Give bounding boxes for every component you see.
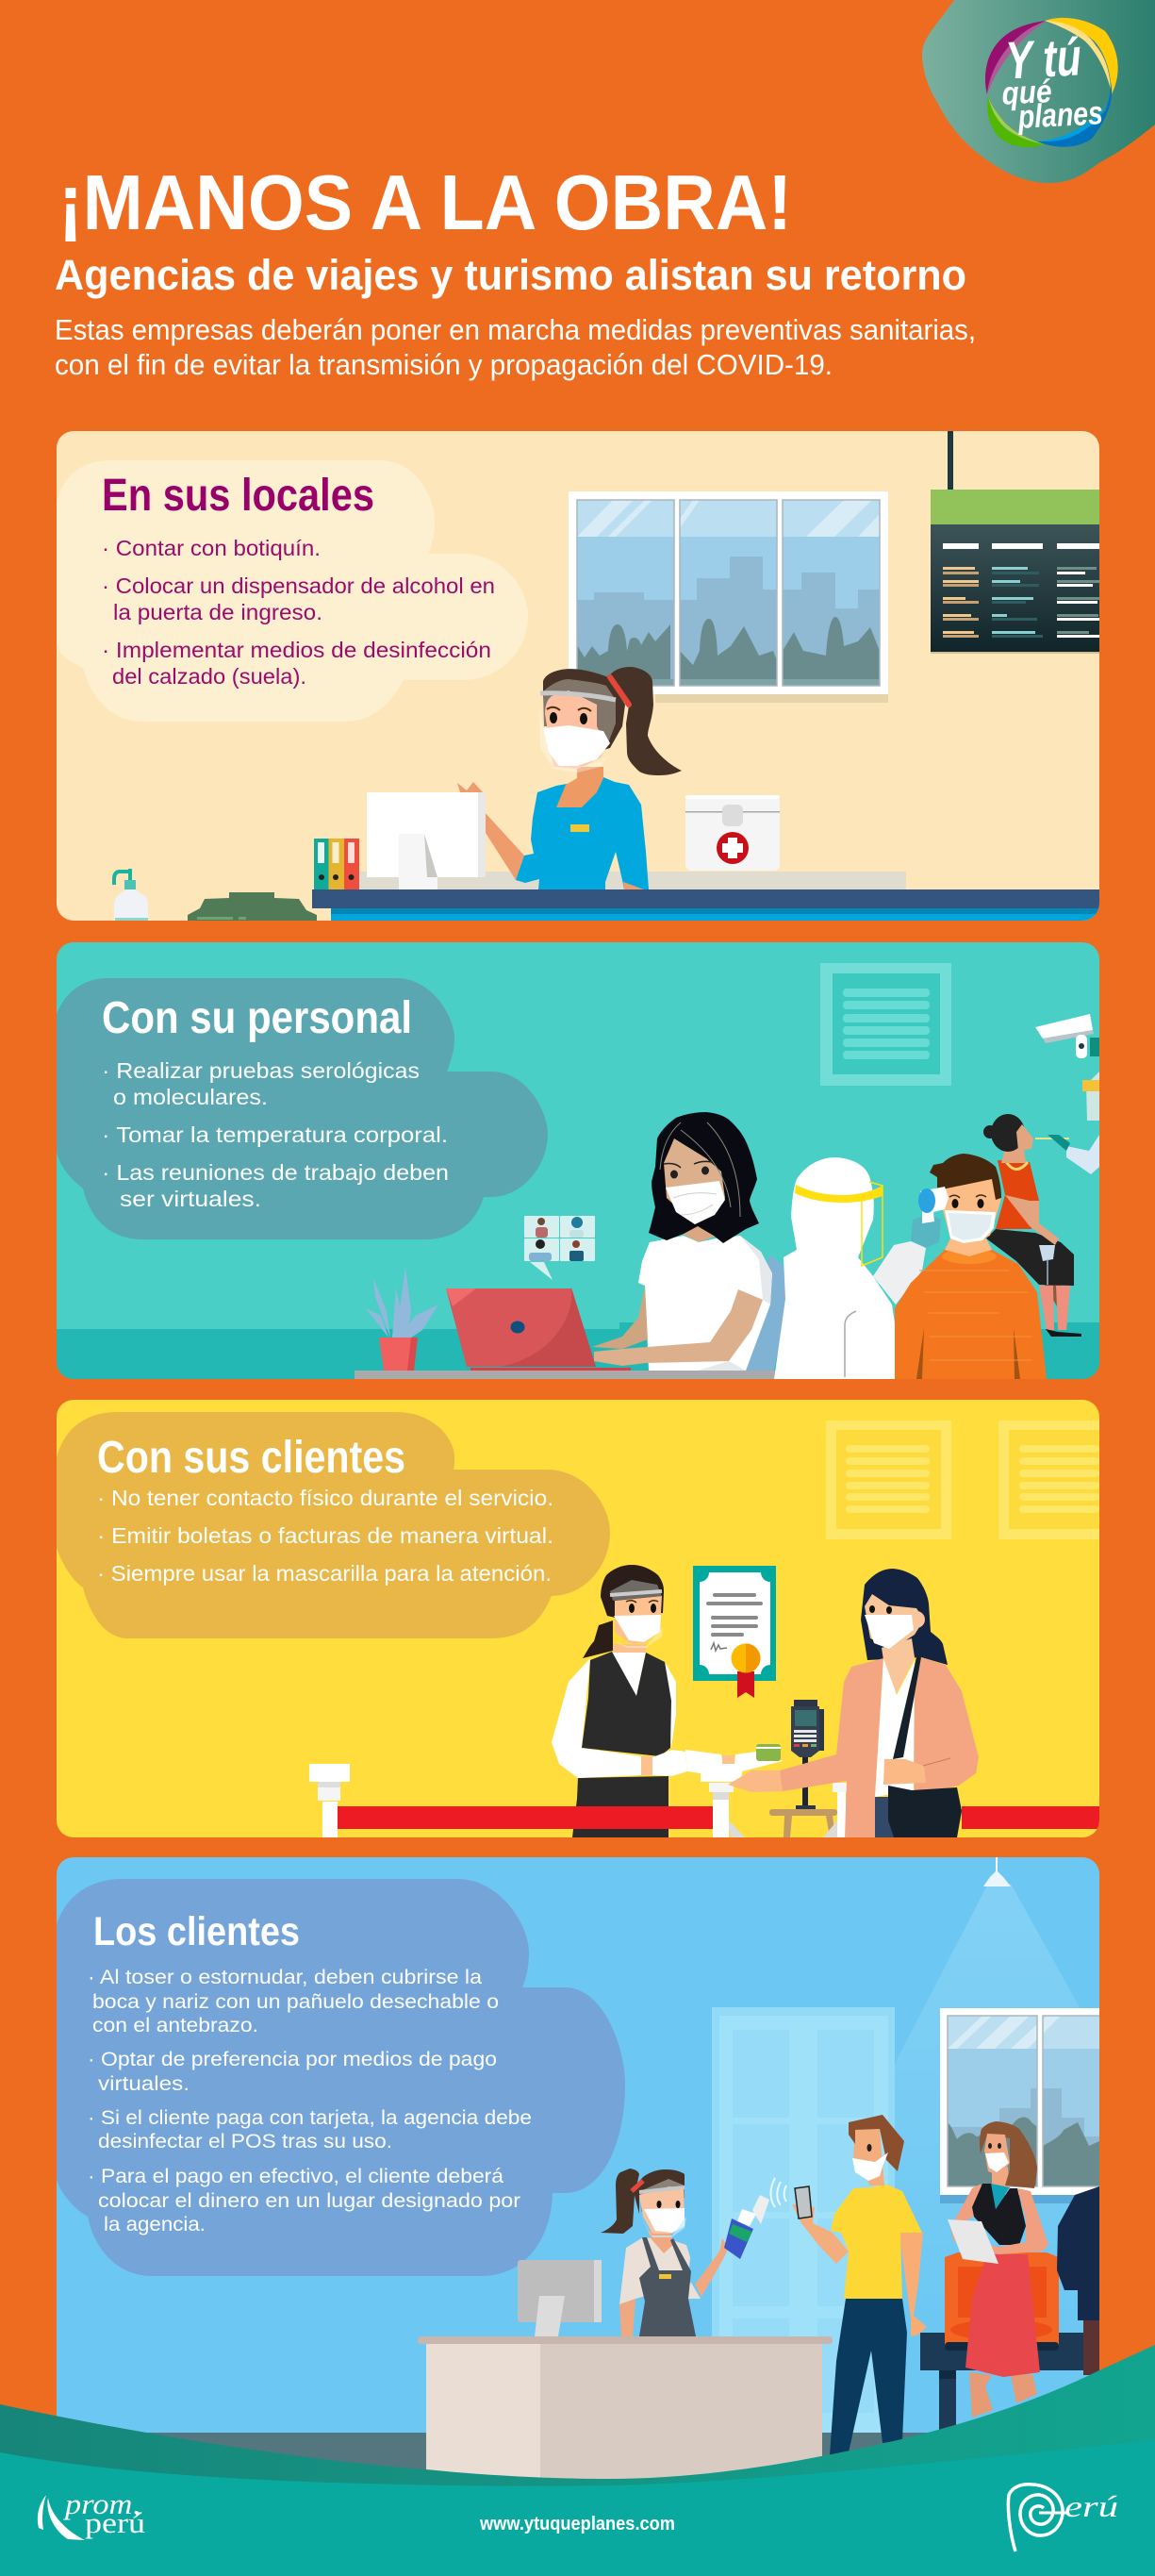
employee in vest: [552, 1565, 687, 1837]
panel: Con su personal: [57, 942, 1099, 1379]
heading: Los clientes: Los clientes: [93, 1909, 300, 1954]
bullet list: boca y nariz con un pañuelo desechable o: [92, 1991, 499, 2013]
cashier: [601, 2169, 729, 2336]
certificate: [693, 1566, 776, 1698]
computer monitor: [367, 792, 486, 890]
bullet list: · Optar de preferencia por medios de pago: [88, 2049, 497, 2070]
window: [569, 491, 888, 703]
bullet list: del calzado (suela).: [112, 664, 306, 689]
heading: En sus locales: En sus locales: [102, 471, 374, 521]
ceiling lamp and light cone: [762, 1857, 1099, 2320]
panel: En sus locales: [57, 431, 1099, 921]
bullet list: [88, 1967, 532, 2235]
bullet list: · Colocar un dispensador de alcohol en: [102, 573, 495, 598]
bullet list: ser virtuales.: [120, 1187, 261, 1211]
bullet list: · Tomar la temperatura corporal.: [102, 1122, 448, 1147]
counter: [312, 889, 1099, 921]
logo: Perú: erú: [1064, 2489, 1118, 2523]
panel: Con sus clientes: [57, 1400, 1099, 1837]
subtitle: Agencias de viajes y turismo alistan su retorno: [55, 251, 966, 299]
logo: prom perú: [38, 2487, 145, 2540]
handheld POS with receipt: [724, 2195, 769, 2259]
bullet list: colocar el dinero en un lugar designado por: [98, 2190, 520, 2212]
customer in yellow shirt: [792, 2115, 927, 2455]
monitor: [518, 2260, 602, 2336]
bullet list: la puerta de ingreso.: [113, 600, 322, 624]
bullet list: o moleculares.: [113, 1085, 268, 1109]
intro text: [55, 313, 976, 381]
seated woman being swabbed: [983, 1114, 1081, 1337]
rope barriers: [309, 1764, 1099, 1837]
text bubble: [57, 978, 548, 1239]
person at right edge: [1057, 2186, 1099, 2375]
heading: Con sus clientes: Con sus clientes: [97, 1433, 405, 1483]
website: www.ytuqueplanes.com: [479, 2514, 675, 2534]
bullet list: · Emitir boletas o facturas de manera virtual.: [97, 1523, 553, 1548]
logo: Y tú qué planes: qué: [1001, 74, 1052, 112]
health worker in protective suit: [774, 1157, 941, 1379]
logo: prom perú: prom,: [63, 2487, 140, 2520]
text bubble: [57, 460, 528, 722]
bullet list: [102, 536, 495, 689]
bullet list: · Si el cliente paga con tarjeta, la agencia debe: [88, 2107, 532, 2129]
woman with mask at laptop: [592, 1112, 789, 1371]
red laptop: [446, 1288, 631, 1371]
bullet list: la agencia.: [104, 2214, 206, 2235]
footer band: [0, 2440, 1155, 2576]
bullet list: · Contar con botiquín.: [102, 536, 321, 560]
receptionist: [457, 667, 682, 889]
grey desk: [355, 1371, 775, 1379]
door: [712, 2007, 895, 2433]
bullet list: · Implementar medios de desinfección: [102, 638, 491, 662]
logo: Y tú qué planes: planes: [1016, 94, 1104, 136]
bullet list: · Las reuniones de trabajo deben: [102, 1160, 449, 1185]
security camera: [1035, 1014, 1099, 1058]
text bubble: [57, 1412, 610, 1638]
ring: [985, 18, 1118, 147]
logo: Y tú qué planes: [922, 0, 1155, 183]
intro text: con el fin de evitar la transmisión y propagación del COVID-19.: [55, 348, 833, 381]
wireless signal: [771, 2178, 786, 2207]
bullet list: virtuales.: [98, 2073, 190, 2095]
POS terminal on small table: [769, 1700, 837, 1837]
bullet list: [97, 1486, 553, 1586]
doctor arm with swab: [1048, 1072, 1099, 1174]
client in pink jacket: [728, 1569, 979, 1837]
waiting chair and table: [920, 2252, 1087, 2436]
intro text: Estas empresas deberán poner en marcha medidas preventivas sanitarias,: [55, 313, 976, 346]
man with mask having temperature taken: [895, 1154, 1047, 1379]
title: ¡MANOS A LA OBRA!: [58, 158, 792, 246]
video call icon: [524, 1216, 595, 1280]
bullet list: · Para el pago en efectivo, el cliente deberá: [88, 2166, 503, 2187]
window: [940, 2008, 1101, 2203]
potted plant: [366, 1267, 438, 1371]
desk back: [358, 872, 906, 889]
bullet list: · Al toser o estornudar, deben cubrirse la: [88, 1967, 482, 1988]
panel: Los clientes: [57, 1857, 1101, 2518]
telephone: [188, 892, 317, 921]
departures board: [931, 431, 1099, 654]
green cash bill: [756, 1744, 781, 1761]
bullet list: · Realizar pruebas serológicas: [102, 1058, 420, 1083]
hand sanitizer: [114, 869, 148, 921]
text bubble: [57, 1879, 625, 2276]
first aid kit: [685, 795, 780, 871]
binders: [314, 839, 359, 889]
customer in red skirt: [948, 2121, 1048, 2418]
bullet list: · No tener contacto físico durante el servicio.: [97, 1486, 553, 1510]
bullet list: · Siempre usar la mascarilla para la atención.: [97, 1561, 552, 1586]
bullet list: desinfectar el POS tras su uso.: [98, 2131, 392, 2152]
bullet list: con el antebrazo.: [92, 2015, 258, 2036]
bullet list: [102, 1058, 449, 1211]
back wave: [0, 2345, 1155, 2576]
wall vents: [826, 1421, 1099, 1539]
logo: prom perú: perú: [85, 2506, 145, 2539]
heading: Con su personal: Con su personal: [102, 993, 412, 1043]
logo: Perú: [1008, 2485, 1118, 2551]
wall vent: [820, 963, 951, 1086]
logo: Y tú qué planes: Y tú: [1004, 26, 1082, 90]
reception counter: [418, 2336, 833, 2485]
handshake and bill: [685, 1744, 783, 1782]
